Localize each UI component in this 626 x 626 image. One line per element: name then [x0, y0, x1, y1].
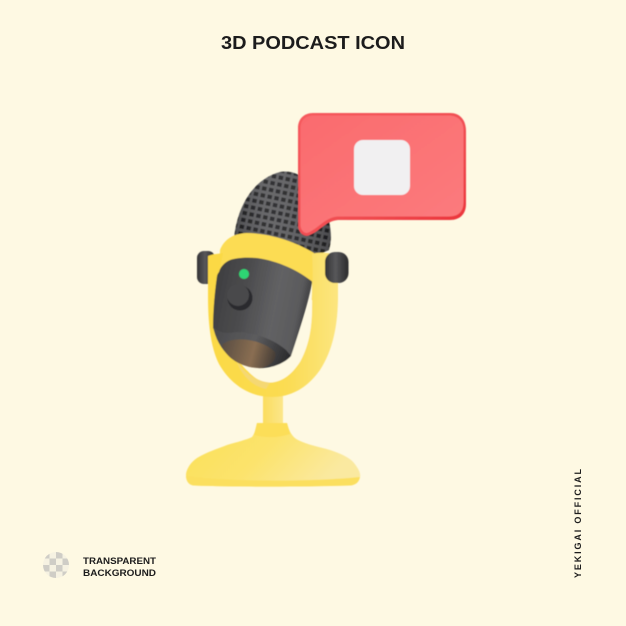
yellow yoke [208, 254, 338, 397]
yellow collar [219, 233, 314, 283]
left pivot knob [197, 251, 215, 284]
right pivot knob [325, 252, 348, 283]
microphone button [227, 284, 252, 310]
microphone end cap [222, 339, 276, 368]
yoke inner band [236, 360, 270, 389]
brand label: YEKIGAI OFFICIAL [573, 468, 583, 578]
badge label [83, 556, 156, 579]
stand base [186, 394, 360, 487]
cream gap under the microphone [249, 296, 312, 382]
title: 3D PODCAST ICON [221, 33, 405, 53]
right yoke upright [312, 253, 338, 300]
microphone illustration [186, 172, 360, 487]
badge label: TRANSPARENT [83, 556, 156, 567]
microphone grille [234, 172, 331, 256]
transparent background badge [43, 552, 156, 579]
left yoke upright [208, 253, 223, 322]
green indicator light [239, 269, 249, 279]
speech bubble [298, 113, 466, 236]
stop square [354, 140, 410, 195]
checker icon [43, 552, 69, 578]
microphone lower ring [213, 326, 291, 368]
microphone body [213, 248, 312, 367]
badge label: BACKGROUND [83, 568, 156, 579]
